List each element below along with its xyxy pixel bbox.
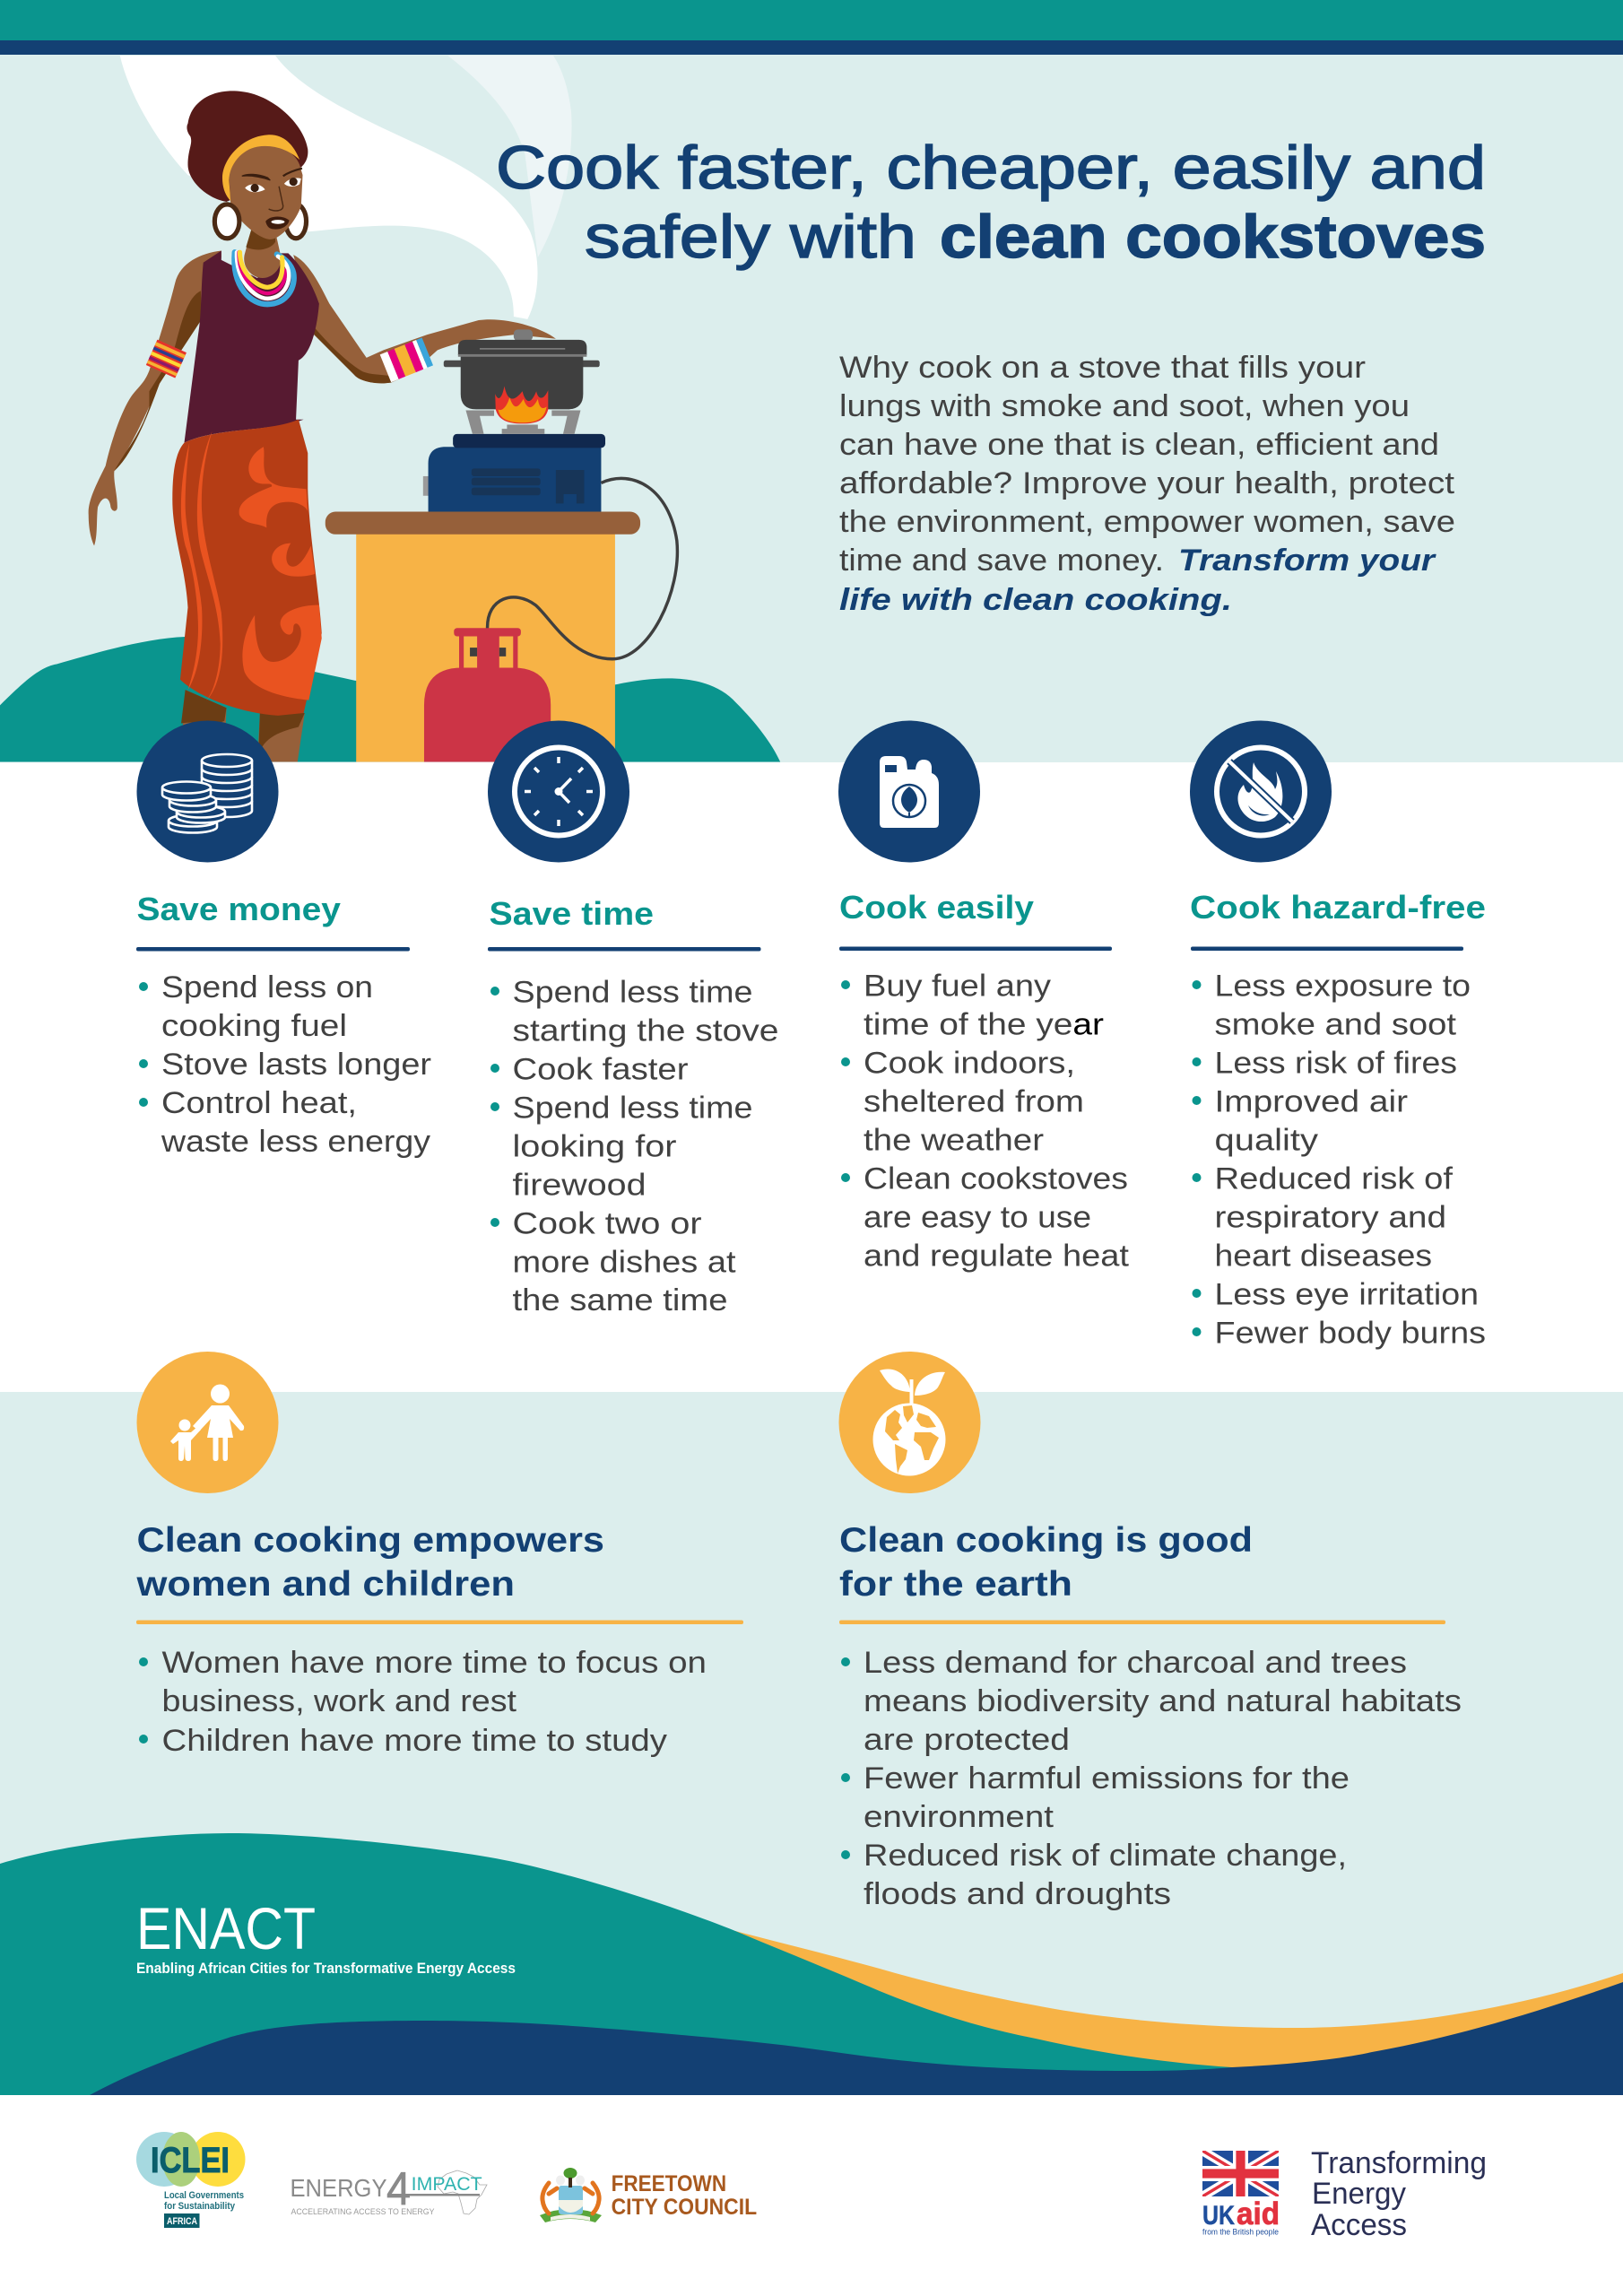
logo: Energy 4 Impact: IMPACT bbox=[412, 2174, 482, 2195]
column: cook hazard-free: heart diseases bbox=[1214, 1239, 1432, 1274]
hero background panel bbox=[0, 55, 1623, 762]
column: cook easily: are easy to use bbox=[864, 1200, 1091, 1234]
column: women and children bbox=[135, 1521, 743, 1758]
column: save money: Control heat, bbox=[161, 1086, 357, 1120]
column: save time: the same time bbox=[513, 1283, 728, 1318]
column: save time: Spend less time bbox=[513, 976, 753, 1010]
column: save time: more dishes at bbox=[513, 1245, 736, 1279]
intro paragraph: the environment, empower women, save bbox=[839, 505, 1455, 539]
logo: Transforming Energy Access bbox=[1311, 2146, 1487, 2242]
column: cook hazard-free: smoke and soot bbox=[1214, 1008, 1457, 1042]
column: save money bbox=[136, 891, 431, 1159]
logo: ICLEI: AFRICA bbox=[167, 2216, 197, 2227]
logo: Energy 4 Impact: ENERGY bbox=[291, 2174, 387, 2202]
earring front bbox=[214, 204, 239, 239]
column: cook hazard-free: Less exposure to bbox=[1214, 969, 1471, 1003]
column: women and children: Women have more time to focus on bbox=[161, 1646, 707, 1680]
icon: fuel can with leaf bbox=[838, 721, 980, 863]
column: good for the earth: Less demand for charcoal and trees bbox=[864, 1646, 1407, 1680]
column: women and children: Clean cooking empowers bbox=[136, 1521, 604, 1560]
column: save money: cooking fuel bbox=[161, 1009, 347, 1043]
logo: UK aid: aid bbox=[1237, 2196, 1280, 2231]
column: good for the earth: means biodiversity and natural habitats bbox=[864, 1684, 1462, 1718]
logo: ICLEI: for Sustainability bbox=[164, 2201, 236, 2212]
logo: Freetown City Council bbox=[540, 2168, 757, 2222]
column: women and children: women and children bbox=[135, 1565, 515, 1604]
column: save time: Spend less time bbox=[513, 1091, 753, 1125]
column: good for the earth: for the earth bbox=[839, 1565, 1072, 1604]
column: good for the earth: environment bbox=[864, 1800, 1055, 1834]
armband bbox=[146, 340, 187, 378]
intro paragraph bbox=[839, 351, 1455, 617]
intro paragraph: can have one that is clean, efficient and bbox=[839, 428, 1439, 462]
intro paragraph: Transform your bbox=[1178, 544, 1436, 578]
gas cylinder bbox=[424, 628, 551, 762]
earring back bbox=[286, 204, 307, 239]
column: cook hazard-free bbox=[1190, 889, 1486, 1351]
bracelet bbox=[380, 337, 433, 382]
logo: Energy 4 Impact bbox=[291, 2163, 487, 2217]
footer waves bbox=[0, 1833, 1623, 2095]
gas hose bbox=[488, 478, 677, 659]
hair bbox=[187, 91, 308, 202]
header band bbox=[0, 0, 1623, 55]
ENACT logo bbox=[136, 1895, 516, 1977]
column: good for the earth: Fewer harmful emissions for the bbox=[864, 1761, 1350, 1796]
column: women and children: business, work and rest bbox=[161, 1684, 517, 1718]
column: good for the earth: are protected bbox=[864, 1723, 1070, 1757]
icon: no fire bbox=[1190, 721, 1332, 863]
column: good for the earth bbox=[839, 1521, 1462, 1911]
column: cook easily: time of the ye ar bbox=[864, 1008, 1104, 1042]
logo: ICLEI bbox=[136, 2132, 246, 2228]
column: women and children: Children have more time to study bbox=[161, 1724, 667, 1758]
icon: clock bbox=[488, 721, 629, 863]
facial features bbox=[242, 169, 302, 230]
logo: UK aid: from the British people bbox=[1202, 2228, 1279, 2238]
pot bbox=[444, 329, 600, 409]
flame bbox=[495, 386, 548, 423]
column: save time: Save time bbox=[490, 895, 654, 932]
logo: UK aid: UK bbox=[1202, 2201, 1235, 2231]
column: cook hazard-free: respiratory and bbox=[1214, 1200, 1446, 1234]
column: cook hazard-free: Less risk of fires bbox=[1214, 1046, 1457, 1080]
woman bbox=[89, 91, 556, 762]
icon: coins bbox=[136, 721, 278, 863]
hero illustration: woman cooking on a clean stove bbox=[0, 56, 780, 762]
intro paragraph: time and save money. bbox=[839, 544, 1164, 578]
lower background panel bbox=[0, 1392, 1623, 2095]
logo: Energy 4 Impact: ACCELERATING ACCESS TO ENERGY bbox=[291, 2207, 435, 2217]
logo: Transforming Energy Access: Access bbox=[1311, 2208, 1407, 2242]
column: cook hazard-free: Less eye irritation bbox=[1214, 1277, 1479, 1311]
necklace bbox=[234, 252, 294, 304]
icon: mother and child bbox=[136, 1352, 278, 1493]
cabinet bbox=[325, 512, 640, 762]
column: cook hazard-free: Reduced risk of bbox=[1214, 1162, 1454, 1196]
ENACT logo: ENACT bbox=[136, 1895, 316, 1961]
column: cook hazard-free: Improved air bbox=[1214, 1085, 1408, 1119]
logo: ICLEI: Local Governments bbox=[164, 2190, 244, 2201]
stove bbox=[423, 410, 605, 512]
intro paragraph: life with clean cooking. bbox=[839, 583, 1232, 617]
column: save money: Stove lasts longer bbox=[161, 1048, 431, 1082]
intro paragraph: Why cook on a stove that fills your bbox=[839, 351, 1366, 385]
column: good for the earth: floods and droughts bbox=[864, 1877, 1171, 1911]
column: save time: Cook two or bbox=[513, 1207, 701, 1241]
column: save money: Save money bbox=[136, 891, 341, 927]
column: cook easily: and regulate heat bbox=[864, 1239, 1130, 1274]
column: cook hazard-free: Cook hazard-free bbox=[1190, 889, 1486, 926]
column: cook easily: Buy fuel any bbox=[864, 969, 1051, 1003]
column: save time: firewood bbox=[513, 1168, 646, 1202]
icon: globe with sprout bbox=[839, 1352, 981, 1493]
logo: Energy 4 Impact: 4 bbox=[386, 2163, 411, 2215]
logo: Freetown City Council: CITY COUNCIL bbox=[612, 2195, 757, 2220]
column: cook easily: Clean cookstoves bbox=[864, 1162, 1128, 1196]
column: save money: Spend less on bbox=[161, 970, 373, 1004]
hills bbox=[0, 637, 780, 762]
face bbox=[229, 145, 303, 239]
title: Cook faster, cheaper, easily and bbox=[496, 134, 1486, 202]
logo: UK aid bbox=[1202, 2151, 1280, 2238]
title: clean cookstoves bbox=[940, 203, 1486, 271]
title bbox=[496, 134, 1486, 271]
skirt bbox=[172, 420, 322, 716]
logo: ICLEI: ICLEI bbox=[151, 2141, 230, 2180]
column: save money: waste less energy bbox=[161, 1125, 430, 1159]
column: good for the earth: Reduced risk of climate change, bbox=[864, 1839, 1347, 1873]
logo: Transforming Energy Access: Transforming bbox=[1311, 2146, 1487, 2180]
column: cook easily: the weather bbox=[864, 1123, 1044, 1157]
column: save time: starting the stove bbox=[513, 1013, 778, 1048]
column: cook easily: Cook indoors, bbox=[864, 1046, 1075, 1080]
column: good for the earth: Clean cooking is good bbox=[839, 1521, 1253, 1560]
headband bbox=[222, 135, 299, 201]
column: cook easily: sheltered from bbox=[864, 1085, 1084, 1119]
steam bbox=[120, 56, 572, 319]
column: save time: Cook faster bbox=[513, 1053, 689, 1087]
column: save time bbox=[488, 895, 778, 1318]
logo: Freetown City Council: FREETOWN bbox=[612, 2171, 726, 2196]
ENACT logo: Enabling African Cities for Transformative Energy Access bbox=[136, 1960, 516, 1977]
intro paragraph: lungs with smoke and soot, when you bbox=[839, 389, 1410, 423]
column: cook easily bbox=[839, 889, 1130, 1274]
column: cook hazard-free: Fewer body burns bbox=[1214, 1317, 1486, 1351]
title: safely with bbox=[585, 203, 916, 271]
column: save time: looking for bbox=[513, 1130, 676, 1164]
column: cook hazard-free: quality bbox=[1214, 1123, 1318, 1157]
intro paragraph: affordable? Improve your health, protect bbox=[839, 466, 1455, 500]
logo: Transforming Energy Access: Energy bbox=[1312, 2177, 1406, 2211]
column: cook easily: Cook easily bbox=[839, 889, 1034, 926]
